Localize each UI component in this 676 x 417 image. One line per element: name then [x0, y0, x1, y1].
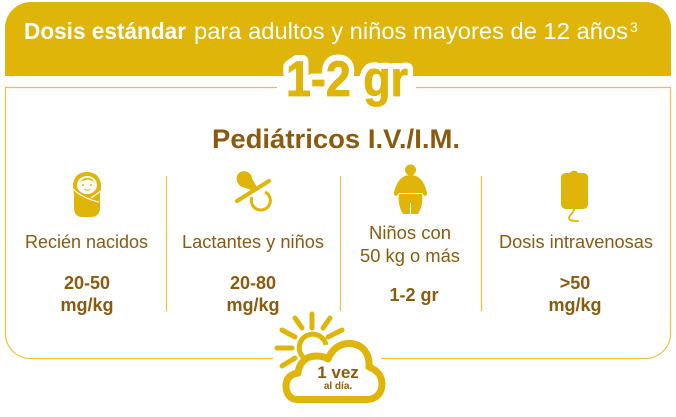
- dose: newborns: [60, 273, 114, 315]
- dose value: 1-2 gr: [286, 51, 408, 107]
- dose: infants and children: [226, 273, 280, 315]
- dose value: 1-2 gr: [286, 51, 408, 107]
- header banner: [5, 2, 671, 76]
- dose: intravenous: >50: [560, 273, 590, 293]
- panel: dosing frame: [5, 88, 671, 358]
- label: intravenous doses: Dosis intravenosas: [499, 232, 653, 252]
- dose: intravenous: mg/kg: [548, 295, 602, 315]
- column dividers: [166, 176, 482, 311]
- dose: newborns: 20-50: [64, 273, 110, 293]
- frequency badge: sun and cloud: [273, 314, 382, 400]
- header superscript: 3: [630, 19, 638, 35]
- dose: infants and children: 20-80: [230, 273, 276, 293]
- label: children over 50 kg: 50 kg o más: [360, 246, 460, 266]
- frequency text: 1 vez: [317, 363, 359, 382]
- header text: audience: para adultos y niños mayores de 12 años: [194, 18, 628, 44]
- icon: pacifier: [237, 171, 270, 210]
- header text: standard dose: Dosis estándar: [24, 18, 186, 44]
- dose: intravenous: [548, 273, 602, 315]
- frequency subtext: al día.: [324, 381, 352, 392]
- icon: swaddled baby: [73, 172, 101, 217]
- dose: children over 50 kg: 1-2 gr: [389, 285, 439, 305]
- icon: IV bag: [561, 171, 588, 221]
- label: children over 50 kg: [360, 223, 460, 266]
- label: children over 50 kg: Niños con: [369, 223, 451, 243]
- label: infants and children: Lactantes y niños: [182, 232, 324, 252]
- icon: heavy child: [394, 164, 427, 214]
- section title: Pediátricos I.V./I.M.: [212, 124, 460, 154]
- dose: newborns: mg/kg: [60, 295, 114, 315]
- label: newborns: Recién nacidos: [25, 232, 148, 252]
- dose: infants and children: mg/kg: [226, 295, 280, 315]
